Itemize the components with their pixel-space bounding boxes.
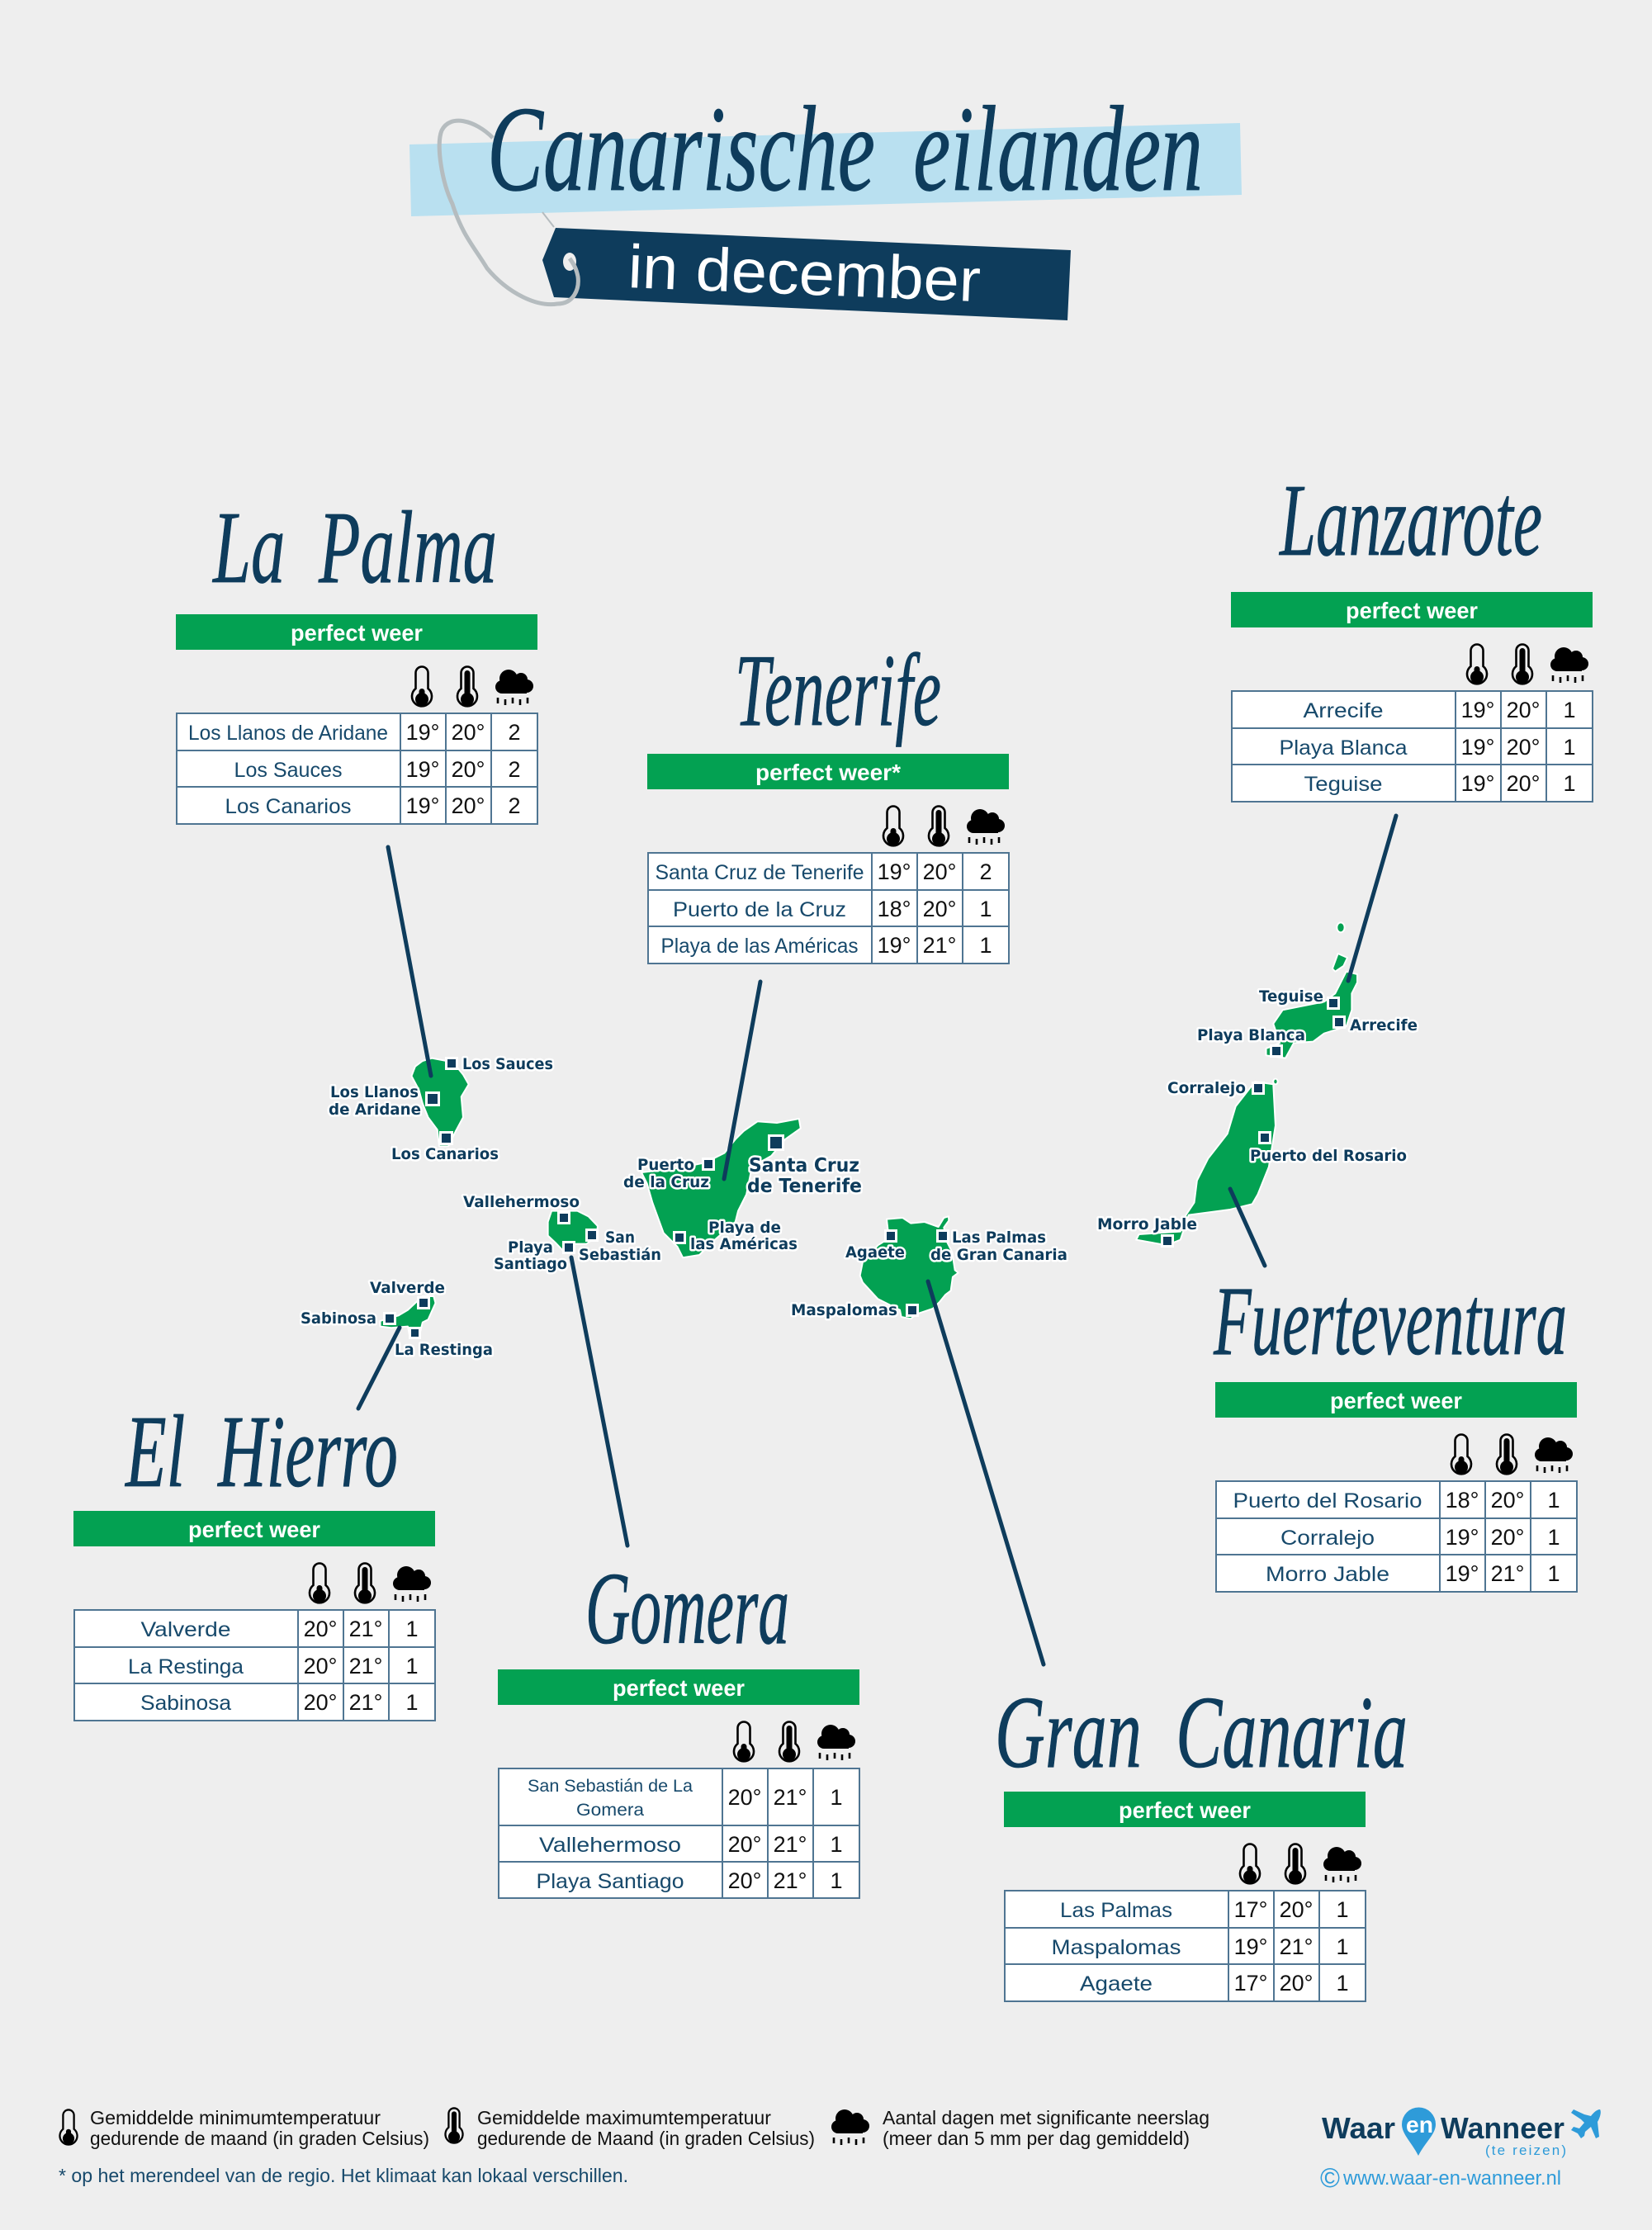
table: 20° <box>728 1832 761 1857</box>
icon: min temperature <box>734 1722 754 1761</box>
table: Los Llanos de Aridane <box>188 722 388 745</box>
table: 1 <box>830 1785 843 1810</box>
table: 21° <box>349 1690 382 1715</box>
table: 20° <box>304 1654 337 1678</box>
table: 1 <box>1336 1971 1349 1996</box>
icon: max temperature <box>355 1564 375 1603</box>
status bar <box>176 614 537 650</box>
logo word: Wanneer: Wanneer <box>1441 2111 1564 2145</box>
table: 20° <box>304 1617 337 1641</box>
panel: Gran Canaria <box>1004 1792 1366 2001</box>
icon: rain cloud <box>1535 1437 1573 1473</box>
icon: rain cloud <box>967 809 1005 845</box>
table: Vallehermoso <box>539 1834 681 1857</box>
table: 1 <box>405 1690 419 1715</box>
icon: max temperature <box>929 806 949 845</box>
island: Gomera <box>548 1211 598 1252</box>
town labels: de Aridane <box>329 1101 421 1119</box>
legend text: min temperature <box>90 2107 429 2149</box>
connector lines <box>358 816 1396 1664</box>
icon: min temperature <box>1467 644 1487 684</box>
legend icon: rain cloud <box>831 2109 869 2145</box>
tag hole <box>563 253 576 271</box>
legend text: max temperature: Gemiddelde maximumtemperatuur <box>477 2107 771 2128</box>
town labels: de Gran Canaria <box>930 1246 1067 1264</box>
icon: map pin <box>1402 2107 1436 2156</box>
table: Playa de las Américas <box>660 935 859 958</box>
town labels: Arrecife <box>1350 1016 1418 1035</box>
icon: rain cloud <box>393 1566 431 1602</box>
town labels: Playa <box>508 1238 553 1257</box>
table: 1 <box>1336 1934 1349 1959</box>
town labels: de la Cruz <box>623 1173 709 1191</box>
heading: Gomera: Gomera <box>585 1552 789 1666</box>
table: 21° <box>1280 1934 1313 1959</box>
table: 19° <box>878 859 911 884</box>
icon: min temperature <box>883 806 903 845</box>
table: 19° <box>1234 1934 1267 1959</box>
icon: rain cloud <box>1550 647 1588 683</box>
table: 2 <box>508 793 521 818</box>
table: Los Canarios <box>225 795 352 818</box>
heading: La Palma: La Palma <box>212 491 497 605</box>
town labels: las Américas <box>690 1235 798 1253</box>
town labels: Sabinosa <box>301 1309 376 1328</box>
island: El Hierro <box>381 1296 435 1338</box>
copyright mark: © <box>1320 2162 1340 2193</box>
legend text: rain <box>883 2107 1209 2149</box>
table: 21° <box>349 1654 382 1678</box>
table: San Sebastián de La <box>528 1777 693 1796</box>
table: 21° <box>1491 1561 1524 1586</box>
panel: Fuerteventura <box>1215 1382 1577 1592</box>
table: 20° <box>1507 698 1540 722</box>
legend icon: min temperature <box>59 2109 78 2145</box>
icon: min temperature <box>1451 1435 1471 1474</box>
table <box>177 713 537 824</box>
table: Las Palmas <box>1060 1899 1172 1922</box>
table: 20° <box>1507 735 1540 760</box>
title tag <box>542 228 1071 320</box>
panel: El Hierro <box>73 1511 435 1721</box>
title block <box>409 82 1242 320</box>
icon: max temperature <box>779 1722 799 1761</box>
logo word: en: en <box>1406 2112 1433 2138</box>
panel: Lanzarote <box>1231 592 1593 802</box>
town labels: Morro Jable <box>1097 1215 1197 1233</box>
table: 1 <box>979 933 992 958</box>
town labels: Los Llanos <box>330 1083 419 1101</box>
town labels: La Restinga <box>395 1341 493 1359</box>
status text: perfect weer* <box>755 760 901 785</box>
table: Arrecife <box>1303 699 1384 722</box>
table: 20° <box>304 1690 337 1715</box>
table: Gomera <box>576 1801 644 1820</box>
town labels: Los Sauces <box>462 1055 553 1073</box>
table: 2 <box>508 757 521 782</box>
town labels: Santiago <box>494 1255 567 1273</box>
table: 21° <box>774 1785 807 1810</box>
legend text: max temperature <box>477 2107 815 2149</box>
table: 21° <box>923 933 956 958</box>
status text: perfect weer <box>291 620 423 646</box>
town labels: Playa de <box>708 1219 781 1237</box>
table: 1 <box>1547 1488 1560 1513</box>
table: 19° <box>1446 1561 1479 1586</box>
town markers <box>386 999 1343 1337</box>
town labels: Sebastián <box>579 1246 661 1264</box>
town labels: Santa Cruz <box>749 1155 859 1177</box>
table: 1 <box>830 1868 843 1893</box>
icon: max temperature <box>1285 1844 1305 1883</box>
legend icon: max temperature <box>445 2108 463 2143</box>
town labels: Puerto <box>637 1156 694 1174</box>
logo: Waar en Wanneer <box>1320 2107 1601 2193</box>
town labels: Los Canarios <box>391 1145 499 1163</box>
table: 19° <box>878 933 911 958</box>
table: 20° <box>728 1785 761 1810</box>
island: Tenerife <box>641 1119 801 1257</box>
table: 21° <box>774 1868 807 1893</box>
table: Santa Cruz de Tenerife <box>656 861 864 884</box>
status text: perfect weer <box>1330 1388 1462 1413</box>
table: 21° <box>774 1832 807 1857</box>
town labels: San <box>605 1229 635 1247</box>
table: 1 <box>405 1654 419 1678</box>
table: Corralejo <box>1280 1527 1375 1550</box>
table: 20° <box>1491 1525 1524 1550</box>
table: 19° <box>1461 735 1494 760</box>
status bar <box>1004 1792 1366 1827</box>
island: Fuerteventura <box>1136 1079 1278 1245</box>
table: Playa Blanca <box>1280 736 1408 760</box>
table <box>1005 1891 1366 2001</box>
status bar <box>498 1669 859 1705</box>
legend <box>59 2107 1209 2186</box>
table: 20° <box>452 793 485 818</box>
icon: rain cloud <box>495 670 533 705</box>
table: Puerto de la Cruz <box>673 898 846 921</box>
icon: rain cloud <box>1323 1847 1361 1882</box>
table: 20° <box>923 859 956 884</box>
town labels: Playa Blanca <box>1197 1026 1305 1044</box>
table: 1 <box>1563 735 1576 760</box>
table: La Restinga <box>128 1655 244 1678</box>
table: 20° <box>1491 1488 1524 1513</box>
status bar <box>1231 592 1593 627</box>
table: 20° <box>1507 771 1540 796</box>
tag string <box>439 121 578 305</box>
status text: perfect weer <box>188 1517 320 1542</box>
icon: min temperature <box>310 1564 329 1603</box>
table: Morro Jable <box>1266 1563 1389 1586</box>
town labels: Vallehermoso <box>463 1193 580 1211</box>
table: 20° <box>452 757 485 782</box>
icon: min temperature <box>412 667 432 706</box>
logo word: Waar: Waar <box>1322 2111 1395 2145</box>
icon: max temperature <box>1512 644 1532 684</box>
table: 1 <box>830 1832 843 1857</box>
icon: rain cloud <box>817 1725 855 1760</box>
table: Teguise <box>1304 773 1382 796</box>
status bar <box>1215 1382 1577 1418</box>
town labels <box>301 987 1418 1359</box>
table: Valverde <box>140 1618 231 1641</box>
table: 20° <box>923 897 956 921</box>
table: 21° <box>349 1617 382 1641</box>
panel: Tenerife <box>647 754 1009 963</box>
island: Lanzarote <box>1266 922 1357 1058</box>
table <box>74 1610 435 1721</box>
legend text: min temperature: gedurende de maand (in graden Celsius) <box>90 2128 429 2149</box>
table: 1 <box>1547 1525 1560 1550</box>
table: 1 <box>1336 1897 1349 1922</box>
town labels: Agaete <box>845 1243 905 1262</box>
table: 2 <box>979 859 992 884</box>
table: 19° <box>1446 1525 1479 1550</box>
table: 20° <box>1280 1971 1313 1996</box>
status text: perfect weer <box>1346 598 1478 623</box>
logo tagline: (te reizen) <box>1485 2142 1566 2158</box>
table: Maspalomas <box>1052 1936 1181 1959</box>
heading: Tenerife: Tenerife <box>735 634 941 748</box>
town labels: Las Palmas <box>952 1229 1046 1247</box>
table: 1 <box>1563 698 1576 722</box>
icon: max temperature <box>1497 1435 1517 1474</box>
table: 19° <box>1461 771 1494 796</box>
status bar <box>73 1511 435 1546</box>
legend text: rain: (meer dan 5 mm per dag gemiddeld) <box>883 2128 1190 2149</box>
table: 17° <box>1234 1971 1267 1996</box>
table: 1 <box>979 897 992 921</box>
heading: Gran Canaria: Gran Canaria <box>995 1676 1408 1790</box>
status bar <box>647 754 1009 789</box>
table: 17° <box>1234 1897 1267 1922</box>
table: Los Sauces <box>234 759 342 782</box>
table: 18° <box>878 897 911 921</box>
town labels: Valverde <box>370 1279 445 1297</box>
icon: airplane <box>1571 2109 1601 2138</box>
table <box>499 1768 859 1898</box>
table: 20° <box>1280 1897 1313 1922</box>
town labels: Maspalomas <box>791 1301 897 1319</box>
icon: max temperature <box>457 667 477 706</box>
heading: El Hierro: El Hierro <box>125 1395 398 1509</box>
status text: perfect weer <box>1119 1797 1251 1823</box>
icon: min temperature <box>1240 1844 1260 1883</box>
table: 19° <box>406 757 439 782</box>
panel: Gomera <box>498 1669 859 1898</box>
table: 2 <box>508 720 521 745</box>
table <box>1232 691 1593 802</box>
status text: perfect weer <box>613 1675 745 1701</box>
table: Agaete <box>1080 1972 1153 1996</box>
island: La Palma <box>411 1058 469 1146</box>
town labels: Corralejo <box>1167 1079 1246 1097</box>
title band <box>409 123 1242 216</box>
footnote: * op het merendeel van de regio. Het klimaat kan lokaal verschillen. <box>59 2165 628 2186</box>
website: www.waar-en-wanneer.nl <box>1342 2167 1561 2190</box>
subtitle: in december <box>627 232 982 315</box>
legend text: rain: Aantal dagen met significante neerslag <box>883 2107 1209 2128</box>
table: 19° <box>1461 698 1494 722</box>
table: 1 <box>405 1617 419 1641</box>
panel: La Palma <box>176 614 537 824</box>
map: connector lines and islands <box>301 816 1418 1664</box>
table: 20° <box>728 1868 761 1893</box>
table <box>1216 1481 1577 1592</box>
table: 1 <box>1563 771 1576 796</box>
island: Gran Canaria <box>860 1216 959 1319</box>
table: 1 <box>1547 1561 1560 1586</box>
legend text: min temperature: Gemiddelde minimumtemperatuur <box>90 2107 381 2128</box>
tag string short segment <box>542 212 554 227</box>
table: Puerto del Rosario <box>1233 1489 1422 1513</box>
table: 19° <box>406 720 439 745</box>
legend text: max temperature: gedurende de Maand (in graden Celsius) <box>477 2128 815 2149</box>
table: 19° <box>406 793 439 818</box>
town labels: Puerto del Rosario <box>1250 1147 1407 1165</box>
table: Sabinosa <box>140 1692 231 1715</box>
table: Playa Santiago <box>537 1870 684 1893</box>
town labels: de Tenerife <box>747 1176 862 1197</box>
table <box>648 853 1009 963</box>
main title: Canarische eilanden <box>487 82 1203 217</box>
table: 18° <box>1446 1488 1479 1513</box>
town labels: Teguise <box>1259 987 1323 1006</box>
table: 20° <box>452 720 485 745</box>
